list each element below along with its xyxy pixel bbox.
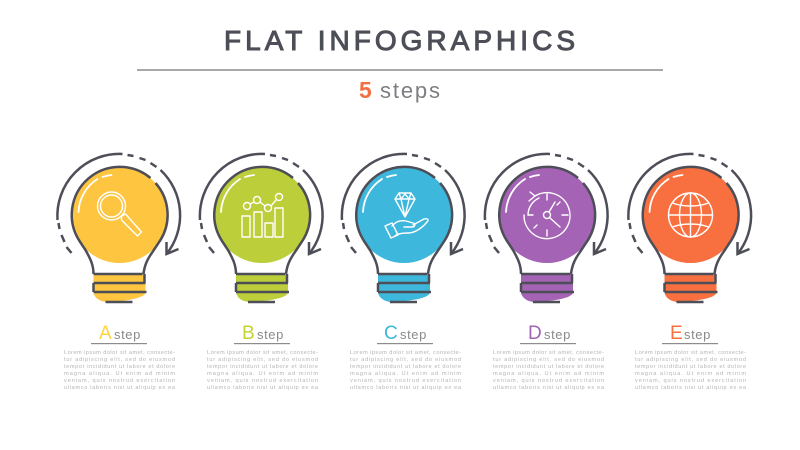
- step C caption: [350, 323, 462, 391]
- subtitle: steps: [380, 78, 440, 103]
- step B caption: veniam, quis nostrud exercitation: [207, 378, 318, 384]
- step C caption: tur adipiscing elit, sed do eiusmod: [350, 357, 461, 363]
- step D caption: D: [528, 323, 542, 344]
- step E caption: tempor incididunt ut labore et dolore: [635, 364, 746, 370]
- step D caption: tur adipiscing elit, sed do eiusmod: [493, 357, 604, 363]
- step A caption: Lorem ipsum dolor sit amet, consecte-: [64, 350, 175, 356]
- step B caption: tempor incididunt ut labore et dolore: [207, 364, 318, 370]
- step E caption: magna aliqua. Ut enim ad minim: [635, 371, 746, 377]
- step E bulb: [628, 154, 751, 302]
- step A caption: veniam, quis nostrud exercitation: [64, 378, 175, 384]
- subtitle: 5: [359, 77, 372, 103]
- step C caption: step: [400, 327, 427, 342]
- icon: magnifier: [98, 192, 142, 236]
- step B caption: B: [242, 323, 255, 344]
- step B caption: Lorem ipsum dolor sit amet, consecte-: [207, 350, 318, 356]
- step A caption: magna aliqua. Ut enim ad minim: [64, 371, 175, 377]
- step B caption: magna aliqua. Ut enim ad minim: [207, 371, 318, 377]
- icon: hand with diamond: [385, 193, 428, 238]
- step D caption: veniam, quis nostrud exercitation: [493, 378, 604, 384]
- step B caption: step: [257, 327, 284, 342]
- step E caption: tur adipiscing elit, sed do eiusmod: [635, 357, 746, 363]
- step D bulb: [485, 154, 608, 302]
- step E caption: [635, 323, 747, 391]
- step C caption: tempor incididunt ut labore et dolore: [350, 364, 461, 370]
- step A bulb: [57, 154, 180, 302]
- step D caption: Lorem ipsum dolor sit amet, consecte-: [493, 350, 604, 356]
- step D caption: [493, 323, 605, 391]
- step E caption: E: [670, 323, 683, 344]
- icon: globe: [668, 193, 712, 237]
- step E caption: veniam, quis nostrud exercitation: [635, 378, 746, 384]
- step E caption: ullamco laboris nisi ut aliquip ex ea: [635, 385, 747, 391]
- step A caption: [64, 323, 176, 391]
- icon: clock: [524, 192, 570, 239]
- step D caption: step: [544, 327, 571, 342]
- step C bulb: [342, 154, 465, 302]
- step A caption: step: [114, 327, 141, 342]
- step A caption: A: [99, 323, 112, 344]
- title: FLAT INFOGRAPHICS: [224, 25, 575, 56]
- step A caption: ullamco laboris nisi ut aliquip ex ea: [64, 385, 176, 391]
- step B bulb: [200, 154, 323, 302]
- step C caption: C: [384, 323, 398, 344]
- step A caption: tur adipiscing elit, sed do eiusmod: [64, 357, 175, 363]
- step A caption: tempor incididunt ut labore et dolore: [64, 364, 175, 370]
- step C caption: ullamco laboris nisi ut aliquip ex ea: [350, 385, 462, 391]
- icon: bar chart: [242, 194, 283, 237]
- step C caption: Lorem ipsum dolor sit amet, consecte-: [350, 350, 461, 356]
- step C caption: magna aliqua. Ut enim ad minim: [350, 371, 461, 377]
- step D caption: ullamco laboris nisi ut aliquip ex ea: [493, 385, 605, 391]
- step E caption: Lorem ipsum dolor sit amet, consecte-: [635, 350, 746, 356]
- step C caption: veniam, quis nostrud exercitation: [350, 378, 461, 384]
- step B caption: tur adipiscing elit, sed do eiusmod: [207, 357, 318, 363]
- step D caption: tempor incididunt ut labore et dolore: [493, 364, 604, 370]
- step B caption: ullamco laboris nisi ut aliquip ex ea: [207, 385, 319, 391]
- step D caption: magna aliqua. Ut enim ad minim: [493, 371, 604, 377]
- step E caption: step: [684, 327, 711, 342]
- step B caption: [207, 323, 319, 391]
